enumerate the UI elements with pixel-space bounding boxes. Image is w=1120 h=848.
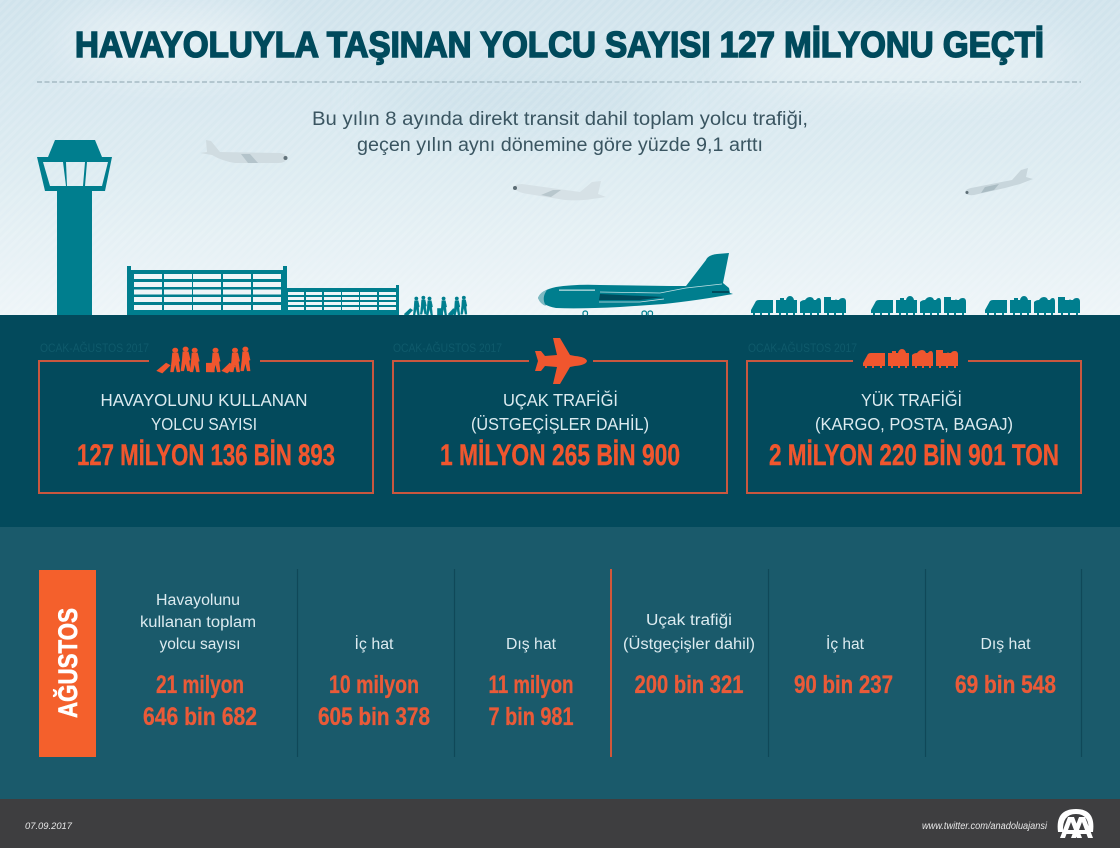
stat: total passengers: 21 milyon [156, 671, 244, 699]
stat: international flights: Dış hat [980, 636, 1031, 653]
stat: domestic passengers: İç hat [354, 635, 394, 653]
subtitle: Bu yılın 8 ayında direkt transit dahil toplam yolcu trafiği, [312, 109, 808, 130]
icon: plane center [513, 181, 606, 200]
panel: yearly totals band [0, 315, 1120, 527]
icon: teal passengers [404, 296, 467, 316]
stat: domestic passengers: 10 milyon [329, 671, 419, 699]
icon: baggage train 3 [985, 296, 1080, 315]
stat: aircraft traffic [623, 612, 755, 699]
title: HAVAYOLUYLA TAŞINAN YOLCU SAYISI 127 MİLYONU GEÇTİ [75, 24, 1044, 65]
footer: www.twitter.com/anadoluajansi [922, 821, 1048, 832]
stat: international passengers [488, 636, 574, 731]
stat: international flights: 69 bin 548 [955, 671, 1056, 699]
panel: cargo traffic box: (KARGO, POSTA, BAGAJ) [815, 414, 1013, 434]
stat: total passengers [140, 592, 257, 731]
panel: cargo traffic box: YÜK TRAFİĞİ [861, 389, 962, 410]
icon: AA logo [1058, 809, 1093, 838]
panel: aircraft traffic box: OCAK-AĞUSTOS 2017 [393, 342, 502, 355]
icon: control tower [37, 140, 112, 316]
icon: orange baggage [863, 349, 958, 368]
icon: orange passengers [157, 347, 250, 373]
icon: terminal building [127, 266, 399, 316]
stat: international flights [955, 636, 1056, 699]
panel: aircraft traffic box: UÇAK TRAFİĞİ [503, 389, 618, 410]
August label [39, 570, 96, 757]
panel: aircraft traffic box: (ÜSTGEÇİŞLER DAHİL) [471, 414, 649, 434]
August label: AĞUSTOS [52, 608, 83, 718]
panel: passengers box: YOLCU SAYISI [151, 414, 257, 434]
panel: aircraft traffic box [393, 338, 727, 493]
stat: total passengers: 646 bin 682 [143, 703, 257, 731]
stat: domestic passengers: 605 bin 378 [318, 703, 430, 731]
icon: airliner on ground [538, 253, 733, 316]
panel: August band [0, 527, 1120, 799]
icon: orange plane [535, 338, 587, 384]
panel: cargo traffic box: OCAK-AĞUSTOS 2017 [748, 342, 857, 355]
stat: international passengers: 11 milyon [488, 671, 574, 699]
stat: international passengers: Dış hat [506, 636, 557, 653]
stat: total passengers: Havayolunu [156, 592, 240, 609]
stat: international passengers: 7 bin 981 [488, 703, 574, 731]
sky background [0, 0, 1120, 316]
icon: baggage train 1 [751, 296, 846, 315]
subtitle: geçen yılın aynı dönemine göre yüzde 9,1 arttı [357, 135, 763, 156]
panel: passengers box: OCAK-AĞUSTOS 2017 [40, 342, 149, 355]
panel: passengers box [39, 342, 373, 493]
icon: baggage train 2 [871, 296, 966, 315]
footer: 07.09.2017 [25, 821, 73, 832]
panel: aircraft traffic box: 1 MİLYON 265 BİN 900 [440, 439, 680, 472]
panel: passengers box: 127 MİLYON 136 BİN 893 [77, 439, 335, 472]
stat: aircraft traffic: (Üstgeçişler dahil) [623, 635, 755, 653]
icon: plane right [965, 168, 1033, 195]
stat: total passengers: yolcu sayısı [160, 636, 240, 653]
stat: domestic flights: 90 bin 237 [794, 671, 893, 699]
stat: aircraft traffic: Uçak trafiği [646, 612, 732, 629]
stat: total passengers: kullanan toplam [140, 614, 256, 631]
footer [0, 799, 1120, 848]
subtitle [312, 109, 808, 156]
panel: passengers box: HAVAYOLUNU KULLANAN [100, 390, 308, 410]
stat: domestic flights: İç hat [826, 635, 865, 653]
stat: aircraft traffic: 200 bin 321 [634, 671, 744, 699]
icon: plane top left [200, 140, 288, 163]
stat: domestic flights [794, 635, 893, 699]
stat: domestic passengers [318, 635, 430, 731]
panel: cargo traffic box [747, 342, 1081, 493]
